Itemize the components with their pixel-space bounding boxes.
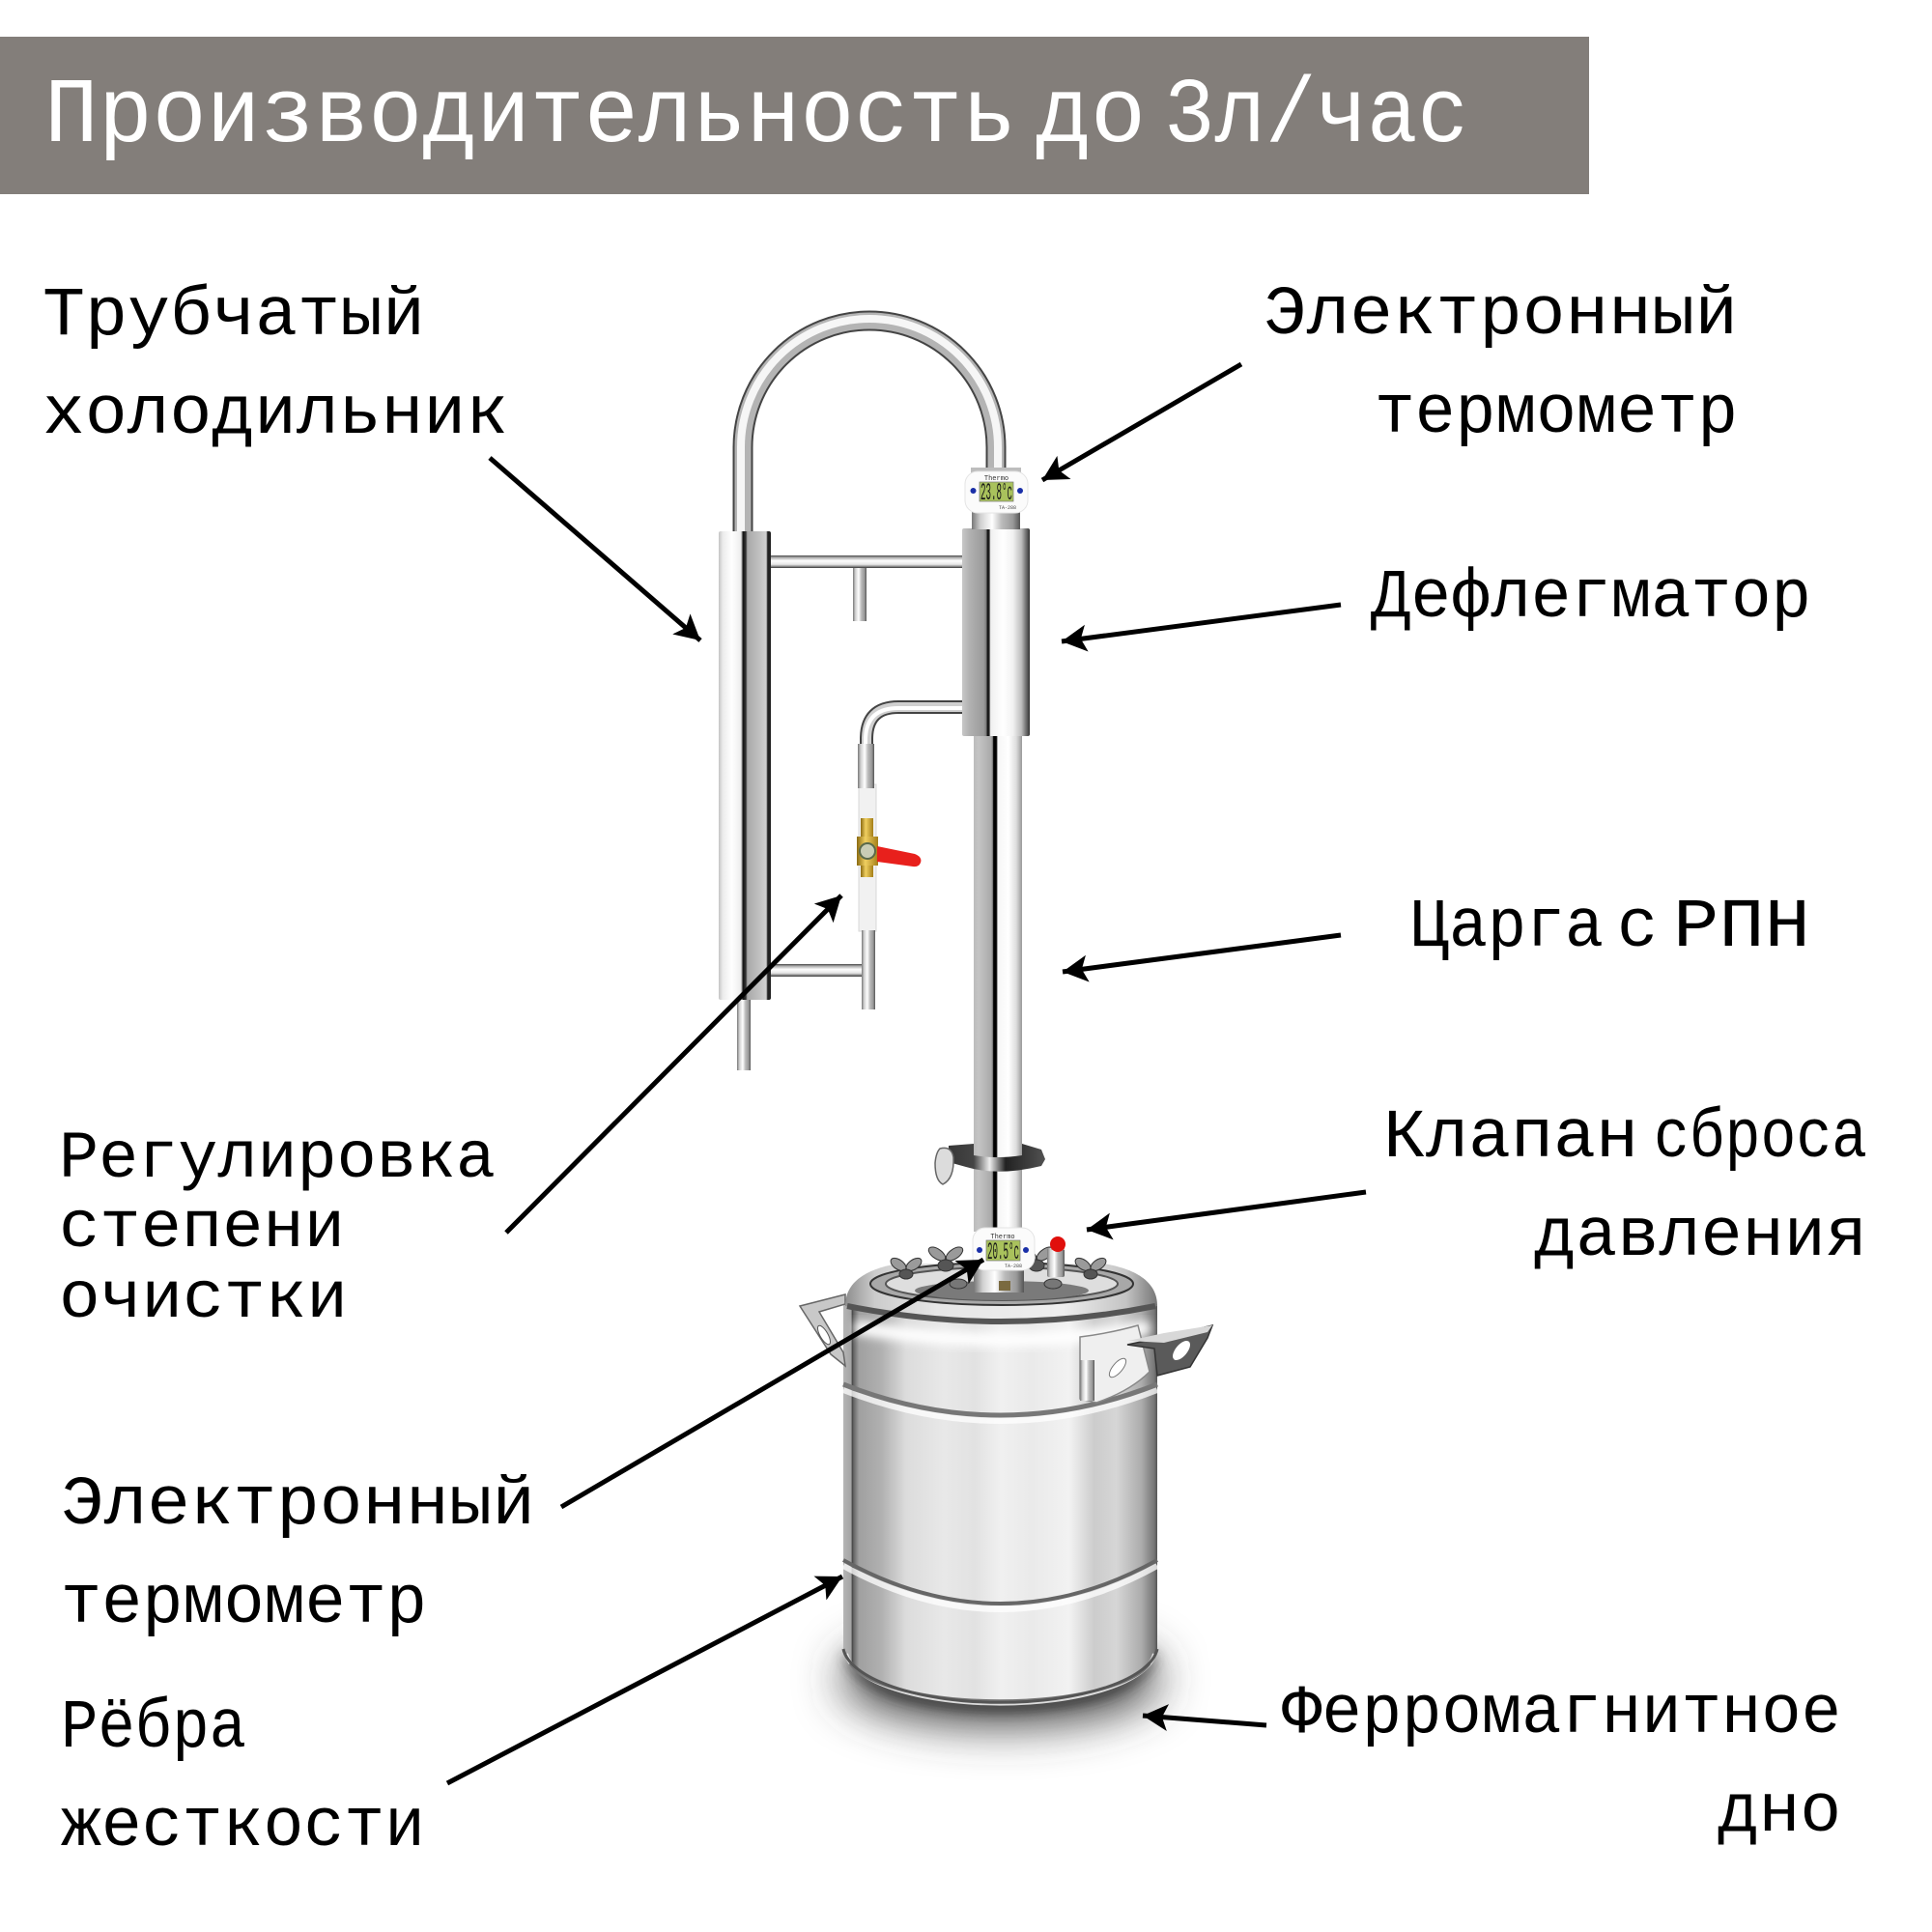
label: upper electronic thermometer bbox=[1264, 277, 1738, 453]
title banner bbox=[0, 37, 1589, 194]
brass valve bbox=[857, 818, 921, 877]
arrow: upper thermometer bbox=[1042, 364, 1241, 480]
hose and valve assembly bbox=[857, 744, 921, 1009]
bent pipe from dephlegmator bbox=[866, 707, 962, 749]
product: distiller apparatus bbox=[719, 319, 1212, 1725]
label: lower electronic thermometer: термометр bbox=[61, 1566, 427, 1643]
label: purification adjustment bbox=[59, 1122, 496, 1337]
nut 4 bbox=[1017, 1244, 1056, 1271]
title banner: 3л/час bbox=[1164, 64, 1468, 169]
label: tubular cooler: холодильник bbox=[43, 377, 508, 454]
label: purification adjustment: Регулировка bbox=[59, 1122, 496, 1197]
label: stiffening ribs: Рёбра bbox=[61, 1690, 246, 1768]
keg bottom rim bbox=[846, 1654, 1154, 1704]
reflux column bbox=[974, 734, 1022, 1232]
arrow: dephlegmator bbox=[1062, 605, 1341, 641]
arrow: tubular cooler bbox=[490, 458, 700, 640]
label: column with RPN bbox=[1410, 890, 1810, 967]
label: pressure relief valve: давления bbox=[1534, 1199, 1867, 1276]
label: ferromagnetic bottom: дно bbox=[1718, 1775, 1841, 1852]
nut 5 bbox=[1044, 1279, 1062, 1289]
upper electronic thermometer bbox=[965, 468, 1028, 513]
label: lower electronic thermometer bbox=[61, 1467, 535, 1643]
wing nuts bbox=[889, 1244, 1108, 1289]
upper rib bbox=[843, 1390, 1157, 1421]
label: tubular cooler: Трубчатый bbox=[43, 278, 425, 355]
lower electronic thermometer bbox=[973, 1228, 1035, 1270]
arrow: relief valve bbox=[1087, 1192, 1366, 1230]
label: upper electronic thermometer: термометр bbox=[1375, 376, 1738, 453]
tubular cooler jacket bbox=[719, 531, 771, 1000]
lower electronic thermometer: TA-288 bbox=[1005, 1264, 1022, 1269]
title banner: Производительность bbox=[44, 64, 1016, 169]
arrow: purification valve bbox=[506, 895, 841, 1233]
arrow: lower thermometer bbox=[561, 1260, 983, 1507]
label: upper electronic thermometer: Электронный bbox=[1264, 277, 1738, 355]
title banner: до bbox=[1036, 64, 1146, 169]
label: pressure relief valve: Клапан bbox=[1383, 1100, 1638, 1178]
label: ferromagnetic bottom: Ферромагнитное bbox=[1282, 1676, 1841, 1753]
label: column with RPN: РПН bbox=[1673, 890, 1810, 967]
label: dephlegmator: Дефлегматор bbox=[1371, 560, 1811, 638]
lower electronic thermometer: 20.5°c bbox=[987, 1238, 1019, 1266]
label: ferromagnetic bottom bbox=[1282, 1676, 1841, 1852]
nut 2 bbox=[926, 1244, 965, 1271]
label: purification adjustment: степени bbox=[59, 1191, 345, 1266]
label: tubular cooler bbox=[43, 278, 508, 454]
lower electronic thermometer: Thermo bbox=[990, 1234, 1015, 1241]
label: column with RPN: Царга bbox=[1410, 890, 1604, 967]
label: stiffening ribs: жесткости bbox=[61, 1789, 425, 1866]
dephlegmator bbox=[962, 528, 1030, 736]
nut 6 bbox=[1073, 1256, 1108, 1279]
keg shadow bbox=[841, 1633, 1160, 1725]
arrow: ferromagnetic bottom bbox=[1143, 1716, 1266, 1725]
keg body bbox=[843, 1304, 1157, 1704]
arched tube bbox=[741, 319, 998, 533]
right handle bbox=[1080, 1325, 1212, 1403]
left handle bbox=[800, 1294, 845, 1366]
keg lid bbox=[845, 1263, 1157, 1340]
label: stiffening ribs bbox=[61, 1690, 425, 1866]
arrow: stiffening ribs bbox=[447, 1577, 842, 1783]
nut 1 bbox=[889, 1256, 923, 1279]
nut 3 bbox=[950, 1279, 967, 1289]
pressure relief valve bbox=[1047, 1236, 1065, 1277]
label: pressure relief valve bbox=[1383, 1100, 1867, 1276]
lower rib bbox=[843, 1566, 1157, 1609]
label: column with RPN: с bbox=[1617, 890, 1658, 967]
upper electronic thermometer: Thermo bbox=[984, 475, 1009, 483]
top connecting pipe with drain bbox=[771, 555, 962, 621]
lower connecting pipe bbox=[771, 964, 864, 977]
collar under lower thermometer bbox=[974, 1265, 1024, 1293]
collar under top thermometer bbox=[972, 508, 1020, 529]
upper electronic thermometer: 23.8°c bbox=[980, 479, 1012, 507]
clamp bbox=[935, 1144, 1045, 1184]
upper electronic thermometer: TA-288 bbox=[999, 505, 1016, 511]
cooler inner tube outlet bbox=[737, 995, 751, 1070]
label: purification adjustment: очистки bbox=[59, 1262, 348, 1337]
arrow: column bbox=[1063, 935, 1341, 972]
label: pressure relief valve: сброса bbox=[1654, 1100, 1867, 1178]
label: lower electronic thermometer: Электронный bbox=[61, 1467, 535, 1545]
